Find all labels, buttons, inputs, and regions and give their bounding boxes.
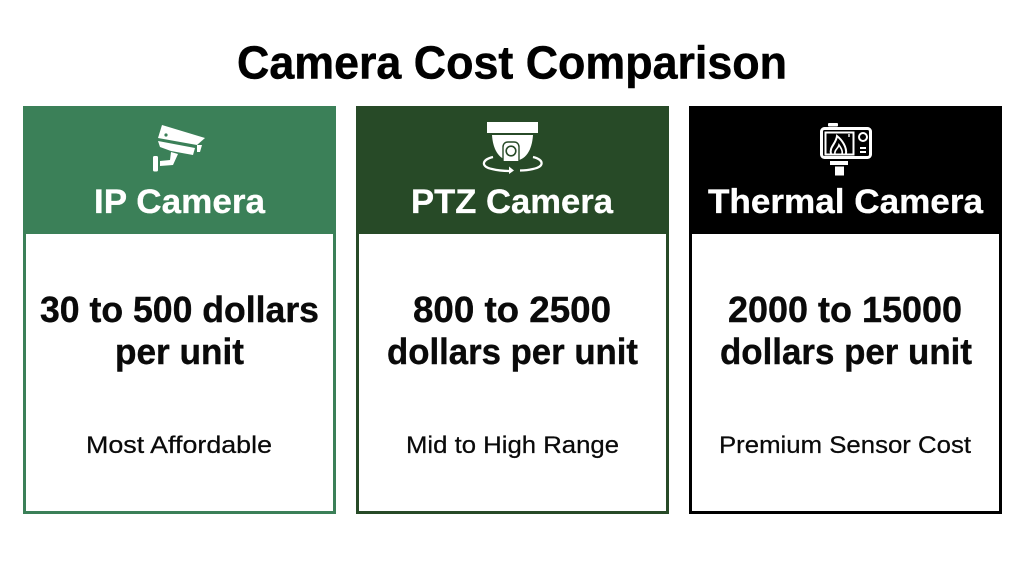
title: Camera Cost Comparison: [237, 36, 787, 88]
header: IP Camera: [23, 106, 336, 234]
note: Premium Sensor Cost: Premium Sensor Cost: [719, 432, 971, 459]
price: PTZ Camera: [387, 289, 638, 372]
price: IP Camera: 30 to 500 dollars: [40, 289, 319, 330]
header: Thermal Camera: [689, 106, 1002, 234]
price: IP Camera: [40, 289, 319, 372]
heading: Thermal Camera: Thermal Camera: [708, 183, 984, 221]
heading: IP Camera: IP Camera: [94, 183, 266, 221]
header: PTZ Camera: [356, 106, 669, 234]
heading: PTZ Camera: PTZ Camera: [411, 183, 614, 221]
price: IP Camera: per unit: [115, 331, 244, 372]
price: Thermal Camera: 2000 to 15000: [728, 289, 962, 330]
icon: security camera: [153, 125, 205, 172]
price: Thermal Camera: dollars per unit: [720, 331, 972, 372]
panel: PTZ Camera: [356, 106, 669, 512]
note: Mid to High Range: Mid to High Range: [406, 432, 619, 459]
panel: Thermal Camera: [689, 106, 1002, 512]
price: Thermal Camera: [720, 289, 972, 372]
panel: IP Camera: [23, 106, 336, 512]
price: PTZ Camera: 800 to 2500: [413, 289, 611, 330]
icon: PTZ dome camera: [484, 122, 542, 174]
note: Most Affordable: Most Affordable: [86, 432, 272, 459]
icon: thermal camera: [822, 123, 870, 176]
price: PTZ Camera: dollars per unit: [387, 331, 638, 372]
